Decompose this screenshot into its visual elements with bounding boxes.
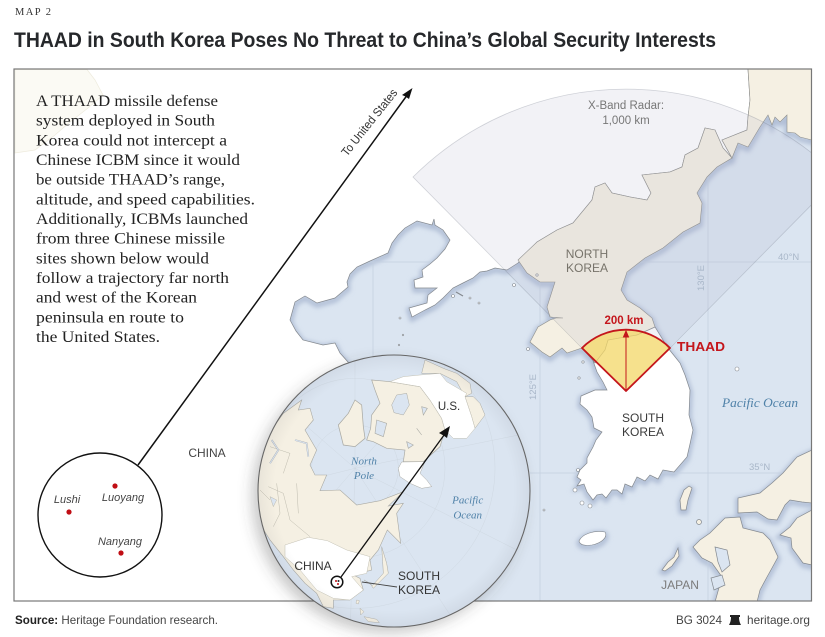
icon: liberty bell xyxy=(729,615,741,625)
globe: label South Korea xyxy=(398,569,440,597)
globe: Japan and islands xyxy=(364,547,388,588)
globe graticule xyxy=(277,366,518,619)
label: South Korea: SOUTH xyxy=(622,411,664,425)
globe: launch site marker xyxy=(331,576,343,588)
map label: MAP 2 xyxy=(15,7,51,18)
land: South Korea xyxy=(577,327,693,500)
text block: explanation: the United States. xyxy=(36,329,160,346)
text block: explanation: sites shown below would xyxy=(36,250,209,267)
labels: radar xyxy=(588,100,664,127)
text block: explanation: from three Chinese missile xyxy=(36,231,225,248)
source note: Source: Heritage Foundation research. xyxy=(15,614,218,627)
text block: explanation: follow a trajectory far north xyxy=(36,270,229,287)
label: South Korea: KOREA xyxy=(622,425,664,439)
globe: label South Korea: SOUTH xyxy=(398,569,440,583)
text block: explanation: altitude, and speed capabilities. xyxy=(36,191,255,208)
land: Jeju and small islands xyxy=(398,274,739,545)
globe: Alaska xyxy=(398,462,432,488)
globe inset xyxy=(257,354,531,628)
globe shadow xyxy=(252,361,524,633)
globe: Greenland xyxy=(338,400,365,447)
globe: Southeast Asian islands xyxy=(356,600,380,623)
label: Japan: JAPAN xyxy=(661,578,699,592)
graticule labels xyxy=(528,252,799,473)
label: North Korea: KOREA xyxy=(566,261,608,275)
text block: explanation: be outside THAAD’s range, xyxy=(36,172,225,189)
graticule labels: 125°E xyxy=(528,374,539,400)
title: THAAD in South Korea Poses No Threat to China’s Global Security Interests xyxy=(14,29,716,52)
credit: website: heritage.org xyxy=(747,613,810,627)
text block: explanation xyxy=(36,93,255,346)
text block: explanation: peninsula en route to xyxy=(36,309,184,326)
labels: radar: 1,000 km xyxy=(602,115,650,127)
land: China xyxy=(14,69,750,601)
globe: Mexico xyxy=(465,397,485,428)
globe: Central America strip xyxy=(422,360,472,397)
land: North Korea xyxy=(518,128,732,363)
globe: Canada xyxy=(367,380,445,462)
THAAD range sector xyxy=(582,330,670,391)
globe: leader line to South Korea xyxy=(362,582,397,587)
globe: label U.S.: U.S. xyxy=(438,401,460,413)
globe: trajectory arrow xyxy=(341,426,450,577)
text block: explanation: Additionally, ICBMs launched xyxy=(36,211,248,228)
label: China: CHINA xyxy=(188,446,226,460)
text block: explanation: system deployed in South xyxy=(36,113,215,130)
globe: China xyxy=(285,537,370,600)
globe: label North Pole xyxy=(351,458,376,479)
label: North Korea xyxy=(566,250,608,272)
text block: explanation: A THAAD missile defense xyxy=(36,93,218,110)
text block: explanation: and west of the Korean xyxy=(36,290,197,307)
label: South Korea xyxy=(622,414,664,436)
text block: explanation: Korea could not intercept a xyxy=(36,132,227,149)
site: Lushi: Lushi xyxy=(54,494,81,506)
graticule labels: 35°N xyxy=(749,462,770,473)
site: Luoyang: Luoyang xyxy=(102,492,145,504)
radar coverage fan xyxy=(412,88,811,348)
label: THAAD: THAAD xyxy=(677,339,725,354)
inset circle: missile sites xyxy=(38,453,162,577)
labels: radar: X-Band Radar: xyxy=(588,100,664,112)
land: Russia xyxy=(722,69,812,158)
graticule labels: 40°N xyxy=(778,252,799,263)
label: To United States: To United States xyxy=(338,86,400,159)
globe: label Pacific Ocean: Pacific xyxy=(451,495,483,507)
globe: label China: CHINA xyxy=(294,559,332,573)
sea background xyxy=(290,116,811,600)
land: Japan xyxy=(662,450,812,602)
globe: label South Korea: KOREA xyxy=(398,583,440,597)
globe: Hudson Bay xyxy=(392,393,409,415)
globe: inner seas and borders xyxy=(260,440,310,537)
credit: report number: BG 3024 xyxy=(676,613,722,627)
arrow: to United States xyxy=(138,88,412,465)
graticule xyxy=(372,186,811,600)
land: faint corner landmass xyxy=(15,70,103,153)
label: 200 km: 200 km xyxy=(604,315,644,327)
globe: label North Pole: North xyxy=(350,455,377,467)
globe: lower US xyxy=(390,373,475,438)
label: North Korea: NORTH xyxy=(566,247,608,261)
graticule labels: 130°E xyxy=(696,265,707,291)
text block: explanation: Chinese ICBM since it would xyxy=(36,152,240,169)
label: Pacific Ocean: Pacific Ocean xyxy=(721,395,798,410)
globe: Eurasia xyxy=(250,400,403,608)
globe: label North Pole: Pole xyxy=(353,470,374,482)
globe: Canadian islands xyxy=(375,407,427,448)
globe: label Pacific Ocean: Ocean xyxy=(453,510,483,522)
site: Nanyang: Nanyang xyxy=(98,536,143,548)
coastal shading xyxy=(290,116,811,600)
globe: label Pacific Ocean xyxy=(452,496,484,518)
range arrow xyxy=(624,331,628,391)
